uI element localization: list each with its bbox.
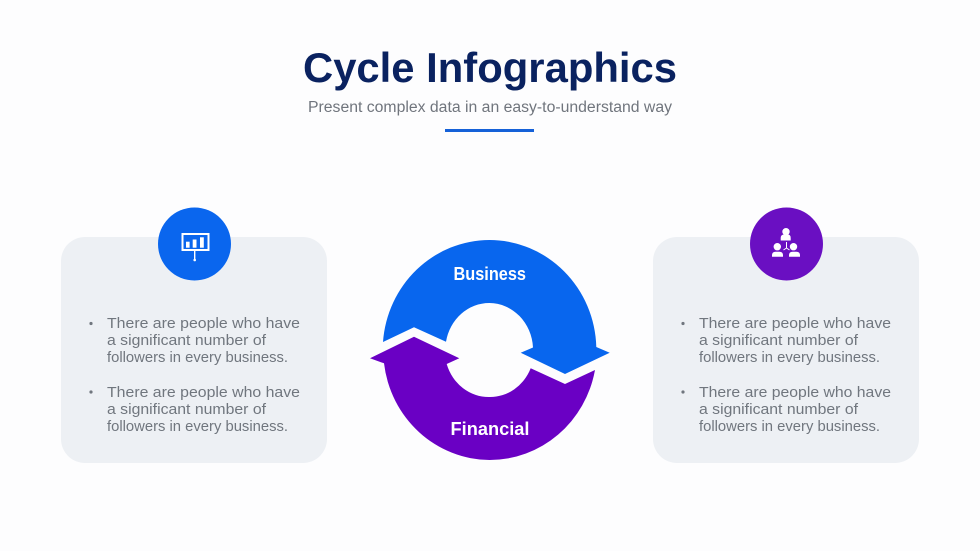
second bullet: a significant number of — [107, 402, 267, 418]
first bullet: followers in every business. — [699, 350, 880, 366]
arrow: financial (purple) — [370, 337, 595, 460]
label: business: Business — [454, 264, 526, 284]
second bullet — [89, 385, 300, 435]
label: financial: Financial — [450, 419, 530, 439]
icon: presentation board — [158, 208, 231, 280]
icon: people hierarchy — [750, 208, 823, 280]
panel background — [61, 237, 327, 463]
second bullet: followers in every business. — [107, 419, 288, 435]
panel: left text — [61, 237, 327, 463]
second bullet — [681, 385, 891, 435]
first bullet: There are people who have — [107, 316, 300, 332]
second bullet: There are people who have — [107, 385, 300, 401]
first bullet: followers in every business. — [107, 350, 288, 366]
arrow: business (blue) — [383, 240, 610, 374]
first bullet — [681, 316, 891, 366]
title underline — [445, 129, 534, 132]
first bullet: a significant number of — [699, 333, 859, 349]
title: Cycle Infographics — [303, 44, 677, 91]
second bullet: a significant number of — [699, 402, 859, 418]
panel: right text — [653, 237, 919, 463]
subtitle: Present complex data in an easy-to-understand way — [308, 99, 672, 116]
second bullet: followers in every business. — [699, 419, 880, 435]
second bullet: There are people who have — [699, 385, 891, 401]
first bullet: There are people who have — [699, 316, 891, 332]
first bullet — [89, 316, 300, 366]
panel background — [653, 237, 919, 463]
first bullet: a significant number of — [107, 333, 267, 349]
cycle diagram — [370, 240, 610, 460]
